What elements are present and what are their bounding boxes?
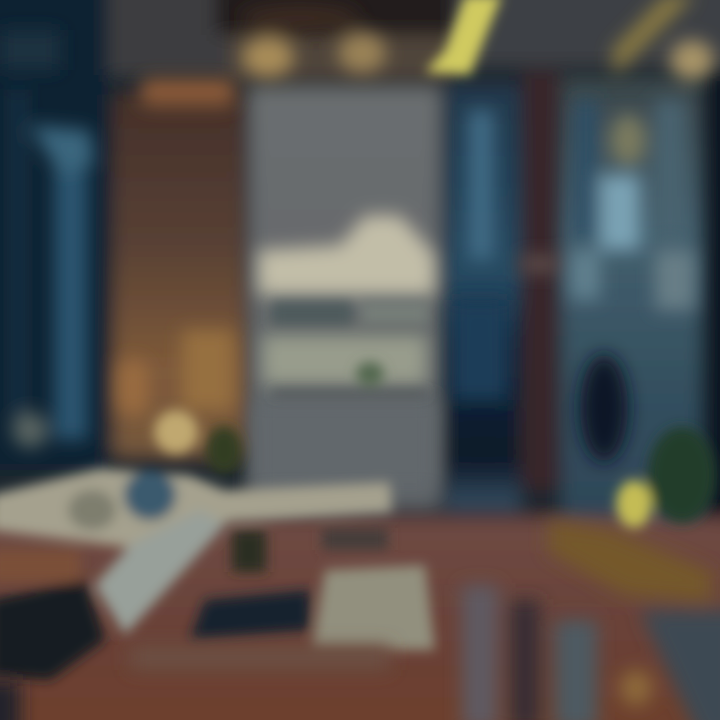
planter [548,520,712,602]
grey centre wall [250,88,440,508]
right planter and floor reflections [0,520,720,720]
pale rug [312,565,435,650]
right plant and yellow vase [616,427,716,528]
sofa and furnishings [0,410,435,680]
sofa back [0,468,392,550]
dark brown column [522,70,560,490]
soft highlights and structure [0,0,714,490]
floor grey right [640,610,720,720]
white shelf glow [258,215,435,385]
yellow ceiling streak [425,0,502,75]
shelf detail [272,302,428,396]
right window [562,78,700,518]
blue panel streak [468,110,494,260]
wood wall panel [114,95,244,455]
coffee table plant [232,530,266,572]
right ceiling strip [612,0,695,75]
floor reflections [462,585,498,720]
brown seat front [0,550,80,582]
ceiling dark centre [215,0,455,35]
cushion [124,470,176,520]
left window [0,0,108,470]
lamp [154,410,198,454]
ceiling lights [242,37,294,77]
sofa dark base [0,580,105,680]
dark oval in right window [580,354,628,462]
plant [206,426,242,474]
blue panel [446,85,520,510]
wood panel glow [140,78,235,106]
wall lower darker [255,400,435,490]
ceiling warm spots [240,4,360,32]
right window bright patch [600,175,640,250]
ceiling right [450,0,720,65]
column light band [520,255,560,273]
left window streaks [54,170,88,440]
ceiling left [90,0,230,75]
blue rug [190,590,310,640]
far right dark edge [704,70,720,540]
floor [0,518,720,720]
sofa arm [95,510,225,635]
